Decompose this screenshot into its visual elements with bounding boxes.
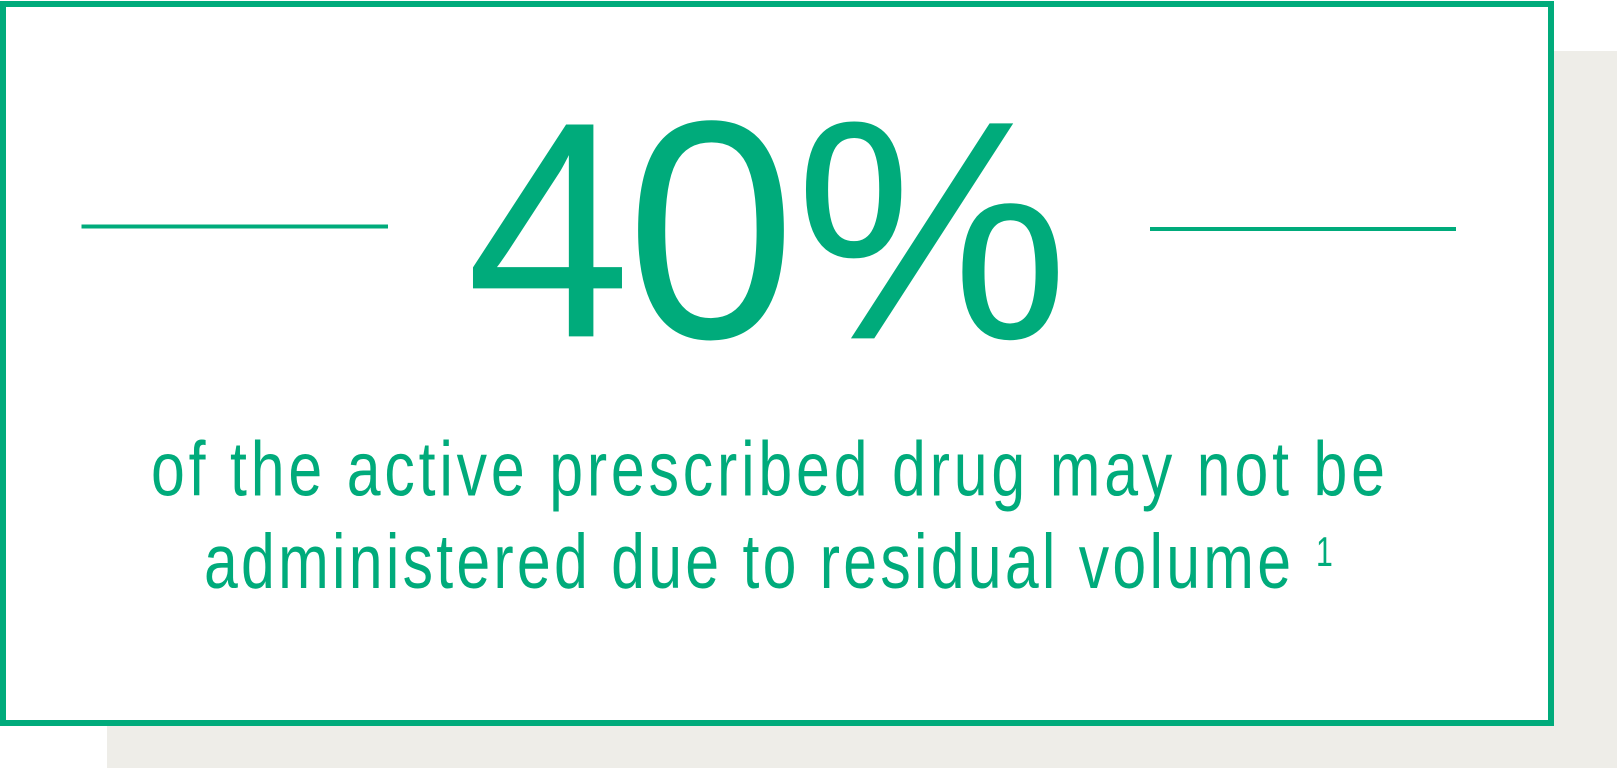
big statistic: 40%: 0 [626, 57, 796, 404]
footnote marker: 1 [1316, 528, 1333, 575]
description text [151, 425, 1385, 605]
big statistic: 40%: 4 [466, 58, 631, 402]
left accent line [82, 224, 388, 228]
description text: administered due to residual volume [204, 518, 1291, 605]
description text: of the active prescribed drug may not be [151, 425, 1385, 512]
big statistic: 40%: % [795, 55, 1069, 405]
big statistic: 40% [466, 55, 1069, 405]
right accent line [1150, 227, 1456, 231]
